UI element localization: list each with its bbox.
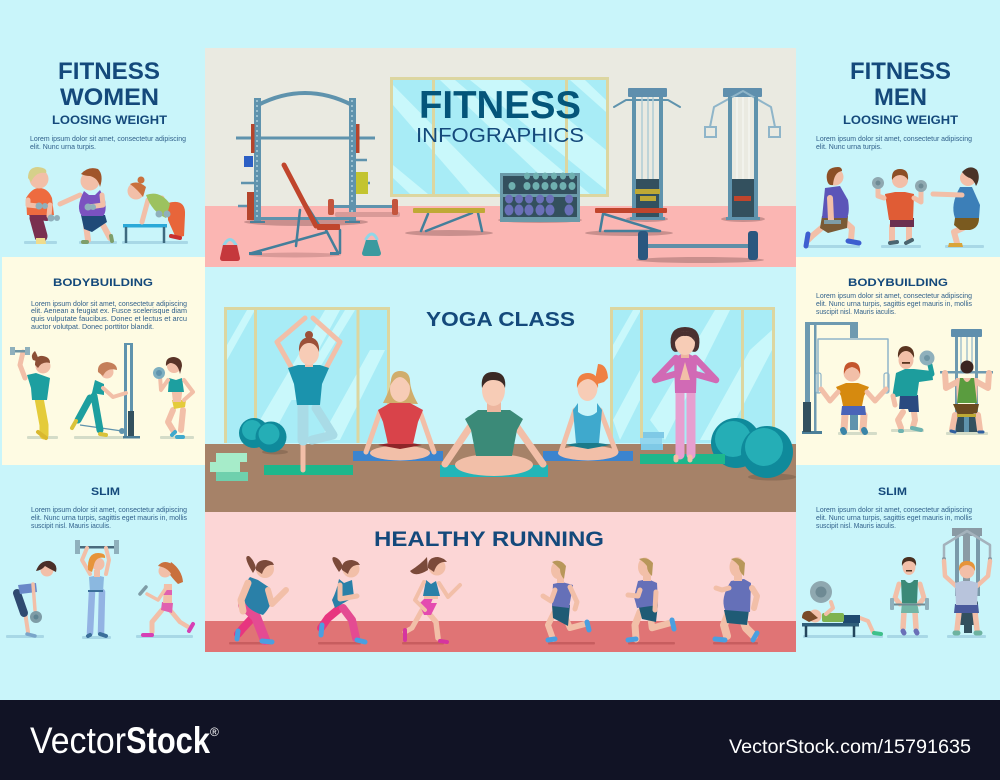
mats	[264, 451, 725, 477]
heading: fitness women	[52, 58, 168, 127]
man lunging	[804, 167, 860, 248]
flat bench red	[585, 208, 673, 236]
overweight woman with dumbbells	[24, 167, 60, 244]
text block: suscipit nisl. Mauris iaculis.	[31, 521, 111, 530]
logo: vectorstock: ®	[210, 725, 219, 739]
man squatting	[933, 167, 984, 248]
big barbell	[636, 231, 764, 263]
heading: fitness men: FITNESS	[850, 58, 951, 85]
text block: Lorem ipsum dolor sit amet, consectetur adipiscing	[30, 134, 186, 143]
flat bench yellow	[405, 208, 493, 236]
squat rack	[236, 93, 375, 226]
text block: suscipit nisl. Mauris iaculis.	[816, 307, 896, 316]
runner man slim	[543, 561, 589, 640]
panel: healthy running	[205, 512, 796, 652]
woman lifting barbell	[75, 540, 119, 639]
runner man large	[715, 557, 757, 640]
panel: yoga class	[205, 307, 796, 512]
overweight woman pointing	[60, 168, 117, 244]
man bench pressing	[802, 581, 883, 638]
man seated in center	[445, 372, 543, 476]
cable machine two	[705, 88, 780, 222]
logo: vectorstock: Stock	[126, 720, 210, 761]
woman lunging	[136, 562, 193, 638]
text block: Lorem ipsum dolor sit amet, consectetur adipiscing	[816, 291, 972, 300]
man with two dumbbells	[872, 169, 927, 248]
logo: vectorstock: Vector	[30, 720, 126, 761]
text block: suscipit nisl. Mauris iaculis.	[816, 521, 896, 530]
man on lat machine from behind	[940, 329, 993, 435]
woman in tree pose	[277, 318, 340, 470]
left exercise balls	[239, 418, 288, 454]
text block	[816, 505, 972, 530]
logo: vectorstock	[30, 720, 219, 761]
runner woman slim	[405, 557, 460, 642]
text block: Lorem ipsum dolor sit amet, consectetur adipiscing	[31, 505, 187, 514]
panel: women bodybuilding	[2, 257, 205, 465]
panel: gym equipment	[205, 48, 796, 267]
title: fitness infographics: FITNESS	[419, 84, 581, 127]
woman deadlifting	[6, 561, 56, 638]
dumbbell rack	[498, 172, 582, 223]
panel: women slim	[6, 486, 193, 639]
heading: fitness women: FITNESS	[58, 58, 160, 85]
shadows	[229, 642, 758, 644]
text block: elit. Nunc urna turpis, sagittis eget mauris in, mollis	[31, 513, 187, 522]
heading: fitness women: LOOSING WEIGHT	[52, 113, 168, 127]
heading: fitness men: MEN	[874, 84, 927, 111]
heading: slim: SLIM	[878, 486, 907, 498]
text block: elit. Nunc urna turpis, sagittis eget mauris in, mollis	[816, 299, 972, 308]
text block	[31, 505, 187, 530]
cable machine one	[614, 88, 680, 222]
text block	[816, 291, 972, 316]
woman on bench	[122, 176, 188, 244]
footer band	[0, 700, 1000, 780]
red haired seated woman	[558, 364, 618, 460]
panel: men slim	[802, 486, 992, 638]
woman with cable machine	[72, 343, 140, 439]
left yoga blocks	[210, 453, 248, 481]
text block	[816, 134, 972, 151]
kettlebells	[220, 234, 381, 261]
text block: elit. Nunc urna turpis.	[30, 142, 96, 151]
text block: elit. Aenean a feugiat ex. Fusce scelerisque diam	[31, 306, 187, 315]
standing woman in prayer pose	[655, 327, 716, 460]
text block: quis vulputate faucibus. Donec et lectus et arcu	[31, 314, 187, 323]
text block	[31, 299, 187, 331]
barbell on floor	[328, 199, 400, 217]
heading: fitness men	[843, 58, 959, 127]
man with barbell	[887, 557, 929, 638]
text block: Lorem ipsum dolor sit amet, consectetur adipiscing	[31, 299, 187, 308]
image id: VectorStock.com/15791635	[729, 737, 971, 758]
incline bench	[249, 165, 341, 258]
runner woman large	[237, 556, 286, 642]
right yoga blocks	[640, 432, 664, 450]
right exercise balls	[711, 418, 796, 480]
heading: fitness men: LOOSING WEIGHT	[843, 113, 959, 127]
mirror	[390, 77, 609, 197]
heading: healthy running: HEALTHY RUNNING	[374, 528, 604, 551]
blonde seated woman	[366, 371, 434, 460]
heading: bodybuilding: BODYBUILDING	[53, 277, 153, 289]
heading: bodybuilding: BODYBUILDING	[848, 277, 948, 289]
text block: Lorem ipsum dolor sit amet, consectetur adipiscing	[816, 505, 972, 514]
panel: fitness women	[24, 58, 188, 244]
right mirror	[610, 307, 775, 443]
man on shoulder press machine	[942, 528, 992, 638]
left mirror	[224, 307, 390, 443]
runner woman medium	[321, 557, 365, 642]
woman lifting dumbbell overhead	[10, 347, 58, 439]
text block: elit. Nunc urna turpis, sagittis eget mauris in, mollis	[816, 513, 972, 522]
title: fitness infographics: INFOGRAPHICS	[416, 124, 584, 147]
heading: fitness women: WOMEN	[60, 84, 159, 111]
cable machine with seated man	[802, 322, 889, 435]
heading: yoga class: YOGA CLASS	[426, 309, 575, 331]
panel: fitness men	[804, 58, 984, 248]
text block: auctor volutpat. Donec porttitor blandit.	[31, 322, 154, 331]
text block: elit. Nunc urna turpis.	[816, 142, 882, 151]
text block	[30, 134, 186, 151]
text block: Lorem ipsum dolor sit amet, consectetur adipiscing	[816, 134, 972, 143]
runner man medium	[628, 558, 674, 640]
woman curling dumbbell	[153, 357, 194, 439]
title: fitness infographics	[416, 84, 584, 147]
muscular man with dumbbell	[891, 346, 934, 432]
heading: slim: SLIM	[91, 486, 120, 498]
panel: men bodybuilding	[796, 257, 1000, 465]
